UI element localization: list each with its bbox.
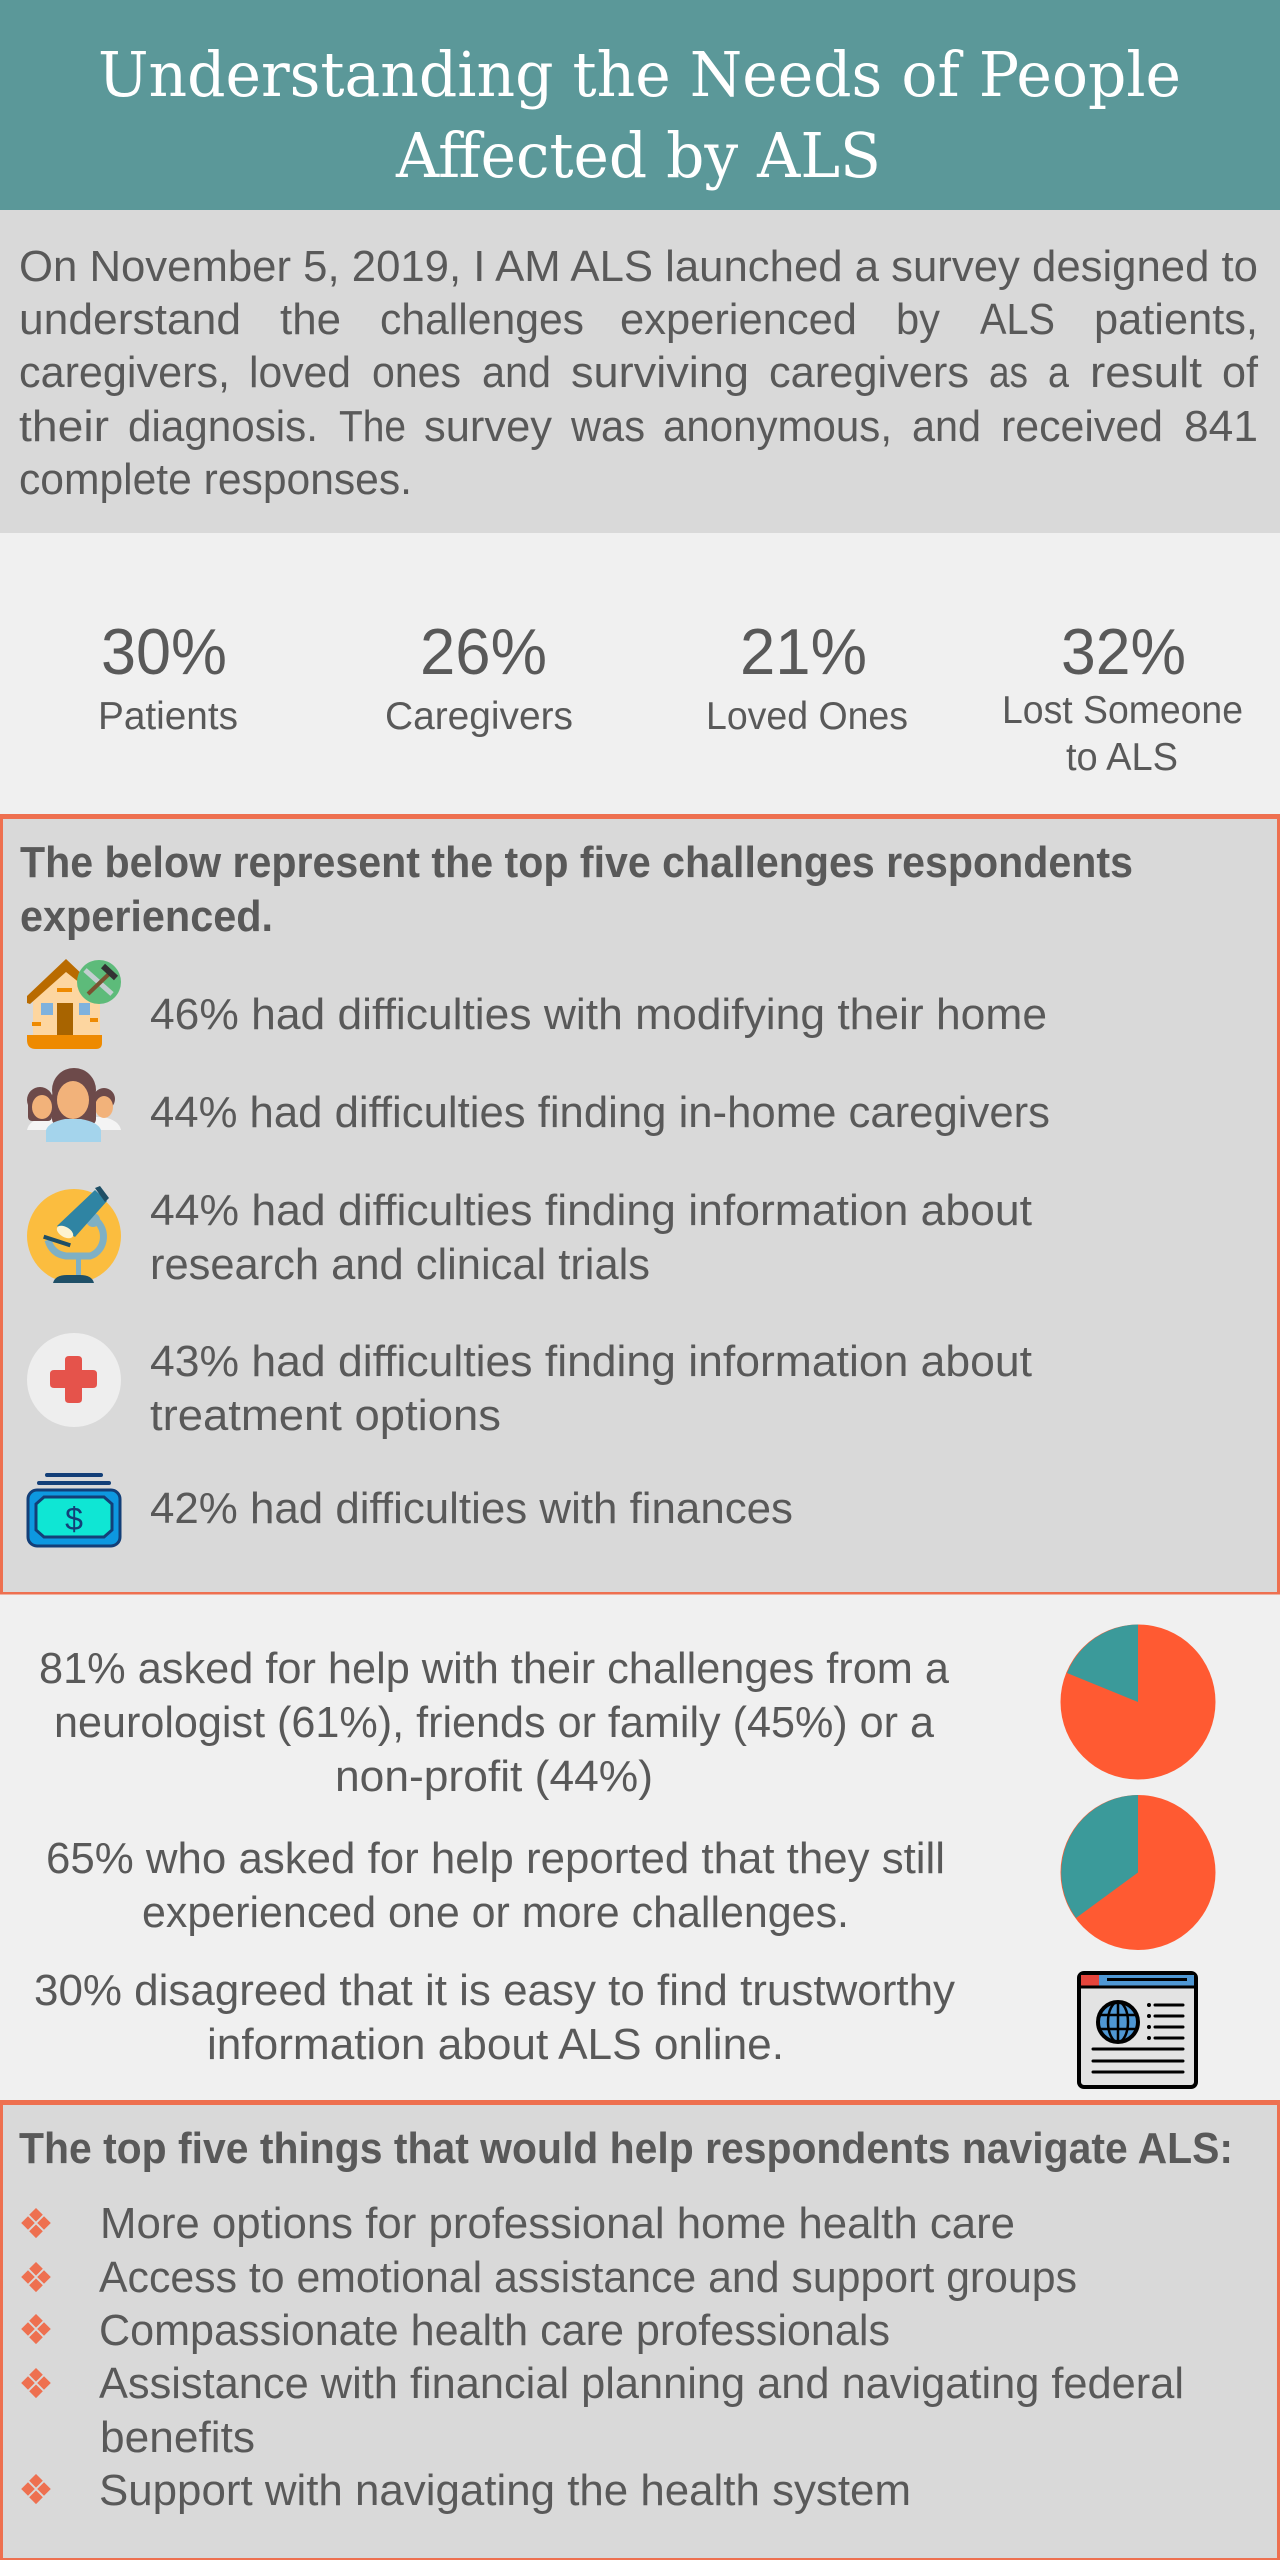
bullet list: [21, 2199, 1184, 2515]
stat: caregivers: [385, 615, 573, 738]
title: Understanding the Needs of People: [98, 38, 1181, 111]
chart: 81% pie: [1060, 1624, 1216, 1780]
panel: survey introduction: patients,: [1094, 295, 1258, 344]
list items: Access to emotional assistance and support groups: [99, 2253, 1077, 2302]
heading: top five challenges: experienced.: [20, 892, 273, 941]
stat: lost someone to ALS: [1002, 615, 1243, 779]
list items: Assistance with financial planning and navigating federal: [99, 2359, 1184, 2408]
stat: caregivers: Caregivers: [385, 695, 573, 738]
text: 81% asked for help: [39, 1644, 950, 1801]
heading: top five challenges: [20, 838, 1133, 941]
panel: survey introduction: a: [1048, 348, 1069, 397]
stat: patients: Patients: [98, 695, 238, 738]
stat: loved ones: [706, 615, 908, 738]
stat: lost someone to ALS: to ALS: [1066, 736, 1178, 779]
panel: survey introduction: 841: [1184, 402, 1258, 451]
row: research and clinical trials: research and clinical trials: [150, 1240, 650, 1289]
panel: survey introduction: their: [19, 402, 109, 451]
row: treatment options: [150, 1337, 1032, 1440]
panel: survey introduction: anonymous,: [663, 402, 892, 451]
panel: survey introduction: understand: [19, 295, 241, 344]
panel: survey introduction: surviving: [571, 348, 749, 397]
icon: money stack: $: [65, 1501, 83, 1537]
stat: loved ones: Loved Ones: [706, 695, 908, 738]
panel: survey introduction: and: [912, 402, 981, 451]
panel: survey introduction: as: [989, 348, 1028, 397]
stat: lost someone to ALS: Lost Someone: [1002, 689, 1243, 732]
title banner: [0, 0, 1280, 210]
list items: Support with navigating the health system: [99, 2466, 911, 2515]
stat: patients: 30%: [101, 615, 227, 688]
icon: house with tools: [27, 959, 121, 1049]
panel: survey introduction: ALS: [980, 295, 1055, 344]
panel: top five challenges: [0, 814, 1280, 1594]
row: research and clinical trials: 44% had difficulties finding information about: [150, 1186, 1032, 1235]
panel: survey introduction: loved: [249, 348, 351, 397]
panel: survey introduction: [0, 210, 1280, 533]
list items: [99, 2199, 1184, 2515]
chart: 65% pie: [1060, 1795, 1216, 1950]
row: in-home caregivers: 44% had difficulties finding in-home caregivers: [150, 1088, 1050, 1137]
icon: medical cross: [27, 1333, 121, 1427]
text: 81% asked for help: 81% asked for help with their challenges from a: [39, 1644, 950, 1693]
panel: survey introduction: caregivers: [769, 348, 969, 397]
heading: top five challenges: The below represent the top five challenges respondents: [20, 838, 1133, 887]
panel: survey introduction: and: [482, 348, 551, 397]
text: 65% still experienced challenges: experienced one or more challenges.: [142, 1888, 849, 1937]
text: 30% disagreed: 30% disagreed that it is easy to find trustworthy: [34, 1966, 955, 2015]
panel: survey introduction: survey: [424, 402, 552, 451]
panel: survey introduction: received: [1001, 402, 1163, 451]
list items: Compassionate health care professionals: [99, 2306, 890, 2355]
stat: caregivers: 26%: [420, 615, 547, 688]
stat: patients: [98, 615, 238, 738]
icon: caregivers group: [27, 1068, 121, 1142]
icon: web page: [1079, 1973, 1196, 2087]
stat: loved ones: 21%: [740, 615, 867, 688]
panel: survey introduction: the: [280, 295, 341, 344]
list items: More options for professional home health care: [100, 2199, 1015, 2248]
panel: survey introduction: challenges: [380, 295, 584, 344]
row: modifying home: 46% had difficulties with modifying their home: [150, 990, 1047, 1039]
panel: survey introduction: On November 5, 2019, I AM ALS launched a survey designed to: [19, 242, 1258, 291]
panel: survey introduction: caregivers,: [19, 348, 230, 397]
icon: microscope: [27, 1186, 121, 1283]
panel: respondent breakdown: [98, 615, 1243, 779]
panel: survey introduction: was: [570, 402, 645, 451]
row: finances: 42% had difficulties with finances: [150, 1484, 793, 1533]
panel: top five things that would help: [0, 2100, 1280, 2560]
stat: lost someone to ALS: 32%: [1061, 615, 1186, 688]
text: 65% still experienced challenges: 65% who asked for help reported that they still: [46, 1834, 945, 1883]
panel: survey introduction: ones: [372, 348, 461, 397]
panel: survey introduction: complete responses.: [19, 455, 412, 504]
text: 81% asked for help: neurologist (61%), friends or family (45%) or a: [54, 1698, 935, 1747]
title: [98, 38, 1181, 192]
panel: survey introduction: experienced: [620, 295, 857, 344]
row: treatment options: 43% had difficulties finding information about: [150, 1337, 1032, 1386]
icon: money stack: [28, 1473, 120, 1546]
panel: survey introduction: result: [1090, 348, 1202, 397]
text: 30% disagreed: information about ALS online.: [207, 2020, 784, 2069]
title: Affected by ALS: [395, 119, 881, 192]
text: 30% disagreed: [34, 1966, 955, 2069]
list items: benefits: [100, 2413, 255, 2462]
text: 81% asked for help: non-profit (44%): [335, 1752, 653, 1801]
panel: survey introduction: of: [1222, 348, 1259, 397]
row: treatment options: treatment options: [150, 1391, 501, 1440]
row: research and clinical trials: [150, 1186, 1032, 1289]
panel: survey introduction: by: [896, 295, 940, 344]
bullets: [21, 2208, 51, 2504]
panel: survey introduction: diagnosis.: [128, 402, 318, 451]
panel: survey introduction: The: [339, 402, 406, 451]
text: 65% still experienced challenges: [46, 1834, 945, 1937]
